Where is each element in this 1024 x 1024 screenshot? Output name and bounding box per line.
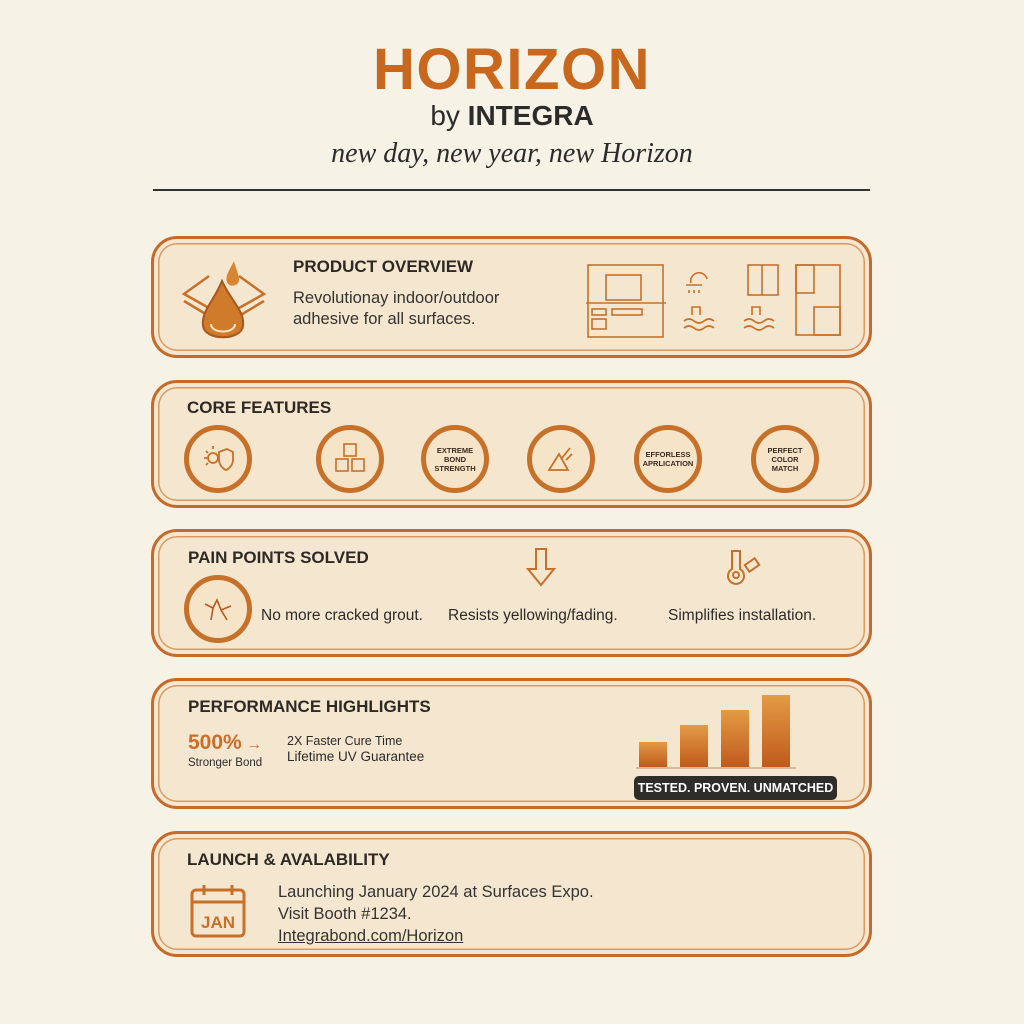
- feature: uv shield: [184, 425, 252, 493]
- text: highlights: Lifetime UV Guarantee: [287, 749, 424, 764]
- text: launch details: [278, 883, 594, 945]
- feature: effortless: EFFORLESS: [645, 450, 690, 459]
- feature: color match: PERFECT: [767, 446, 802, 454]
- text: launch details: Integrabond.com/Horizon: [278, 927, 463, 945]
- bar chart: [636, 692, 796, 769]
- icons: surfaces: [586, 264, 841, 338]
- panel: pain points: [151, 529, 872, 657]
- feature: bond strength: BOND: [444, 454, 466, 464]
- stat: 500%: 500% →: [188, 731, 262, 754]
- text: grout: No more cracked grout.: [261, 607, 423, 624]
- panel: product overview: [151, 236, 872, 358]
- text: launch details: Launching January 2024 at Surfaces Expo.: [278, 883, 594, 901]
- icon: calendar: [190, 885, 246, 938]
- feature: effortless: [634, 425, 702, 493]
- icon: drop: [182, 261, 266, 338]
- feature: bond strength: STRENGTH: [434, 464, 476, 472]
- heading: CORE FEATURES: [187, 398, 331, 417]
- title: HORIZON: [373, 37, 651, 102]
- text: yellowing: Resists yellowing/fading.: [448, 607, 618, 624]
- text: highlights: 2X Faster Cure Time: [287, 734, 402, 748]
- icon: thermometer: [727, 550, 760, 585]
- stat: 500%: Stronger Bond: [188, 757, 262, 769]
- feature: effortless: APRLICATION: [643, 459, 693, 468]
- text: adhesive for all surfaces.: [293, 310, 476, 328]
- feature: bond strength: EXTREME: [437, 446, 473, 454]
- panel: launch: [151, 831, 872, 957]
- feature: color match: [751, 425, 819, 493]
- tagline: new day, new year, new Horizon: [331, 138, 693, 169]
- feature: bond strength: [421, 425, 489, 493]
- text: Revolutionay indoor/outdoor: [293, 289, 499, 307]
- text: [293, 289, 500, 328]
- heading: PERFORMANCE HIGHLIGHTS: [188, 697, 431, 716]
- icon: calendar: JAN: [201, 913, 235, 932]
- feature: color match: COLOR: [771, 454, 799, 464]
- badge: TESTED. PROVEN. UNMATCHED: [638, 781, 833, 795]
- feature: color match: MATCH: [772, 464, 798, 472]
- heading: PRODUCT OVERVIEW: [293, 257, 473, 276]
- heading: LAUNCH & AVALABILITY: [187, 850, 390, 869]
- badge: [634, 776, 837, 800]
- text: installation: Simplifies installation.: [668, 607, 816, 624]
- heading: PAIN POINTS SOLVED: [188, 548, 369, 567]
- text: highlights: [287, 734, 424, 764]
- feature: trowel: [527, 425, 595, 493]
- subtitle: by INTEGRA: [430, 100, 594, 131]
- stat: 500%: [188, 731, 262, 769]
- icon: cracked: [184, 575, 252, 643]
- panel: core features: [151, 380, 872, 508]
- feature: cubes: [316, 425, 384, 493]
- panel: performance: [151, 678, 872, 809]
- text: launch details: Visit Booth #1234.: [278, 905, 412, 923]
- icon: arrow down: [526, 548, 556, 586]
